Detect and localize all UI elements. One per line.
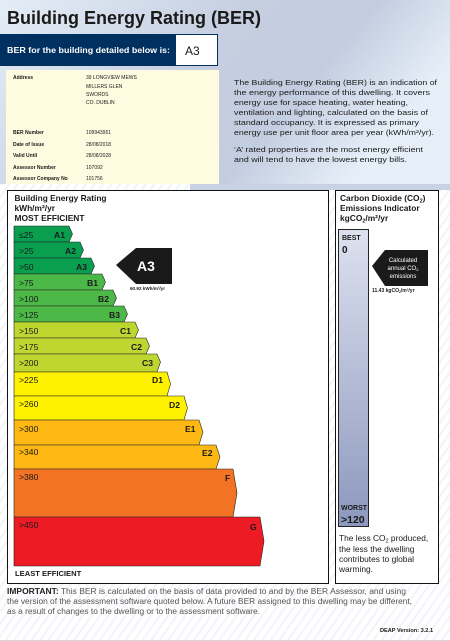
panel: building details: CO. DUBLIN	[86, 100, 115, 106]
rating arrow: A3: A3	[137, 258, 155, 274]
CO2 scale bar	[338, 230, 368, 526]
band labels: >260	[19, 399, 39, 409]
band labels: >450	[19, 520, 39, 530]
rating banner: A3	[185, 44, 200, 58]
CO2 heading: 2	[420, 198, 423, 204]
panel: building details: 109943951	[86, 130, 111, 136]
panel: building details: MILLERS GLEN	[86, 84, 123, 90]
version label: DEAP Version: 3.2.1	[380, 628, 433, 634]
panel: building details: 28/08/2028	[86, 153, 111, 159]
band labels: A1	[54, 230, 65, 240]
panel: energy rating chart	[8, 190, 328, 584]
band labels: E1	[185, 424, 196, 434]
panel: building details: Assessor Company No	[13, 176, 68, 182]
rating arrow: A3	[116, 248, 172, 291]
band labels: F	[225, 473, 230, 483]
panel: building details: Address	[13, 75, 33, 81]
band labels: A2	[65, 246, 76, 256]
CO2 heading: /m²/yr	[365, 213, 389, 223]
important note: the version of the assessment software quoted below. A future BER assigned to this dwelling may be different,	[7, 597, 412, 606]
panel: building details: 107092	[86, 165, 103, 171]
CO2 scale bar: >120	[341, 514, 365, 526]
band labels: >175	[19, 342, 39, 352]
band labels: D1	[152, 375, 163, 385]
chart heading	[14, 193, 106, 223]
CO2 arrow: emissions	[390, 274, 416, 280]
CO2 note: 2	[386, 538, 389, 544]
band labels: >25	[19, 246, 34, 256]
CO2 note	[338, 533, 428, 574]
CO2 arrow: Calculated	[389, 258, 417, 264]
CO2 note: produced,	[389, 533, 428, 543]
band labels: E2	[202, 448, 213, 458]
CO2 arrow	[372, 250, 428, 294]
band labels: A3	[76, 262, 87, 272]
CO2 note: warming.	[338, 564, 373, 574]
text block: BER explanation: ventilation and lighting, calculated on the basis of	[234, 108, 429, 117]
rating banner: BER for the building detailed below is:	[7, 45, 170, 55]
band labels: >150	[19, 326, 39, 336]
CO2 note: The less CO	[339, 533, 386, 543]
band labels: B3	[109, 310, 120, 320]
CO2 heading: kgCO	[340, 213, 362, 223]
band labels: D2	[169, 400, 180, 410]
CO2 scale bar: WORST	[341, 505, 368, 512]
panel: building details: Date of Issue	[13, 142, 44, 148]
text block: BER explanation: and will tend to have the lowest energy bills.	[234, 155, 407, 164]
band labels: >225	[19, 375, 39, 385]
band labels: C2	[131, 342, 142, 352]
text block: BER explanation: energy use per unit floor area per year (kWh/m²/yr).	[234, 128, 434, 137]
CO2 scale bar: 0	[342, 245, 348, 256]
CO2 note: the less the dwelling	[339, 544, 415, 554]
rating arrow: A3: 60.92 kWh/m²/yr	[130, 286, 165, 291]
CO2 arrow: /m²/yr	[401, 288, 415, 294]
panel: building details: BER Number	[13, 130, 44, 136]
CO2 arrow: 2	[399, 290, 401, 294]
panel: CO2 indicator	[336, 190, 438, 584]
text block: BER explanation: standard occupancy. It is expressed as primary	[234, 118, 419, 127]
band labels: >300	[19, 424, 39, 434]
CO2 arrow: 11.43 kgCO	[372, 288, 399, 294]
panel: building details: SWORDS	[86, 92, 109, 98]
band labels: ≤25	[19, 230, 33, 240]
panel: building details: Valid Until	[13, 153, 38, 159]
important note: as a result of changes to the dwelling or to the assessment software.	[7, 607, 260, 616]
band labels: >340	[19, 447, 39, 457]
band labels	[19, 230, 257, 532]
rating banner	[0, 34, 218, 66]
chart heading: MOST EFFICIENT	[14, 213, 85, 223]
text block: BER explanation: ‘A’ rated properties are the most energy efficient	[234, 145, 423, 154]
band labels: >125	[19, 310, 39, 320]
band labels: >75	[19, 278, 34, 288]
CO2 heading: Emissions Indicator	[340, 203, 420, 213]
band labels: C1	[120, 326, 131, 336]
band labels: >380	[19, 472, 39, 482]
CO2 arrow: annual CO	[388, 266, 416, 272]
important note	[7, 587, 412, 616]
band labels: C3	[142, 358, 153, 368]
chart heading: kWh/m²/yr	[14, 203, 56, 213]
CO2 heading	[340, 193, 426, 224]
CO2 heading: 2	[362, 218, 365, 224]
CO2 heading: )	[423, 193, 426, 203]
CO2 scale bar: BEST	[342, 235, 361, 242]
title: Building Energy Rating (BER)	[7, 8, 261, 28]
panel: building details: 28/08/2018	[86, 142, 111, 148]
text block: BER explanation: The Building Energy Rating (BER) is an indication of	[234, 78, 438, 87]
band labels: >100	[19, 294, 39, 304]
panel: building details: 39 LONGVIEW MEWS	[86, 75, 138, 81]
band labels: >200	[19, 358, 39, 368]
band labels: G	[250, 522, 257, 532]
CO2 arrow: 2	[416, 267, 419, 272]
CO2 heading: Carbon Dioxide (CO	[340, 193, 420, 203]
text block: BER explanation: energy use for space heating, water heating,	[234, 98, 408, 107]
text block: BER explanation: the energy performance of this dwelling. It covers	[234, 88, 430, 97]
text block: BER explanation	[234, 78, 438, 164]
panel: building details: Assessor Number	[13, 165, 56, 171]
CO2 note: contributes to global	[339, 554, 414, 564]
band labels: B1	[87, 278, 98, 288]
panel: building details	[6, 70, 219, 184]
chart heading: Building Energy Rating	[14, 193, 106, 203]
least efficient label: LEAST EFFICIENT	[15, 569, 82, 578]
panel: building details: 101756	[86, 176, 103, 182]
band labels: >50	[19, 262, 34, 272]
rating bars	[14, 226, 264, 566]
band labels: B2	[98, 294, 109, 304]
important note: IMPORTANT: This BER is calculated on the basis of data provided to and by the BER Assessor, and using	[7, 587, 406, 596]
